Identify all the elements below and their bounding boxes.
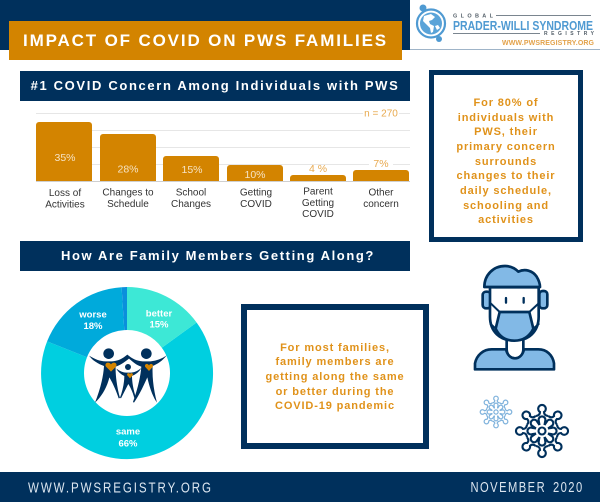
heading: #1 COVID concern: #1 COVID Concern Among Individuals with PWS — [31, 78, 399, 93]
label: better: 15% — [149, 320, 169, 330]
callout: most families: getting along the same — [266, 371, 404, 383]
label: better: better — [146, 308, 172, 320]
bar: Getting COVID 10%: Getting — [240, 188, 272, 198]
callout: 80% of individuals — [429, 70, 583, 242]
label: same: same — [116, 426, 140, 438]
callout: most families: For most families, — [280, 342, 390, 354]
icon: globe — [417, 4, 445, 42]
bar: Changes to Schedule 28%: Schedule — [107, 199, 149, 210]
icon: small light virus — [480, 396, 512, 428]
donut chart: family relations — [41, 287, 214, 460]
bar: Parent Getting COVID 4%: Getting — [302, 198, 334, 209]
bar: Loss of Activities 35%: Activities — [45, 200, 85, 210]
logo rule — [410, 49, 600, 50]
label: same: 66% — [118, 438, 138, 450]
segment: same 66% — [41, 322, 213, 459]
callout: 80% of individuals: daily schedule, — [460, 185, 552, 197]
heading: #1 COVID concern — [20, 71, 410, 101]
logo text — [453, 14, 595, 47]
bar: Getting COVID 10%: 10% — [244, 169, 266, 181]
bar: Parent Getting COVID 4%: COVID — [302, 209, 334, 220]
bar: Parent Getting COVID 4% — [290, 163, 346, 220]
top navy band — [0, 0, 410, 50]
bar: School Changes 15%: Changes — [171, 199, 211, 210]
callout: 80% of individuals: primary concern — [456, 141, 556, 153]
segment: worse 18% — [47, 287, 124, 357]
segment: better 15% — [127, 287, 197, 348]
bar chart: top concerns — [36, 108, 410, 220]
callout: 80% of individuals: PWS, their — [474, 126, 538, 138]
label: worse: 18% — [83, 321, 103, 332]
icon: family — [89, 348, 167, 403]
callout: 80% of individuals: changes to their — [457, 170, 555, 182]
bar: Loss of Activities 35% — [36, 122, 92, 210]
callout: 80% of individuals: For 80% of — [474, 97, 538, 109]
callout: most families: or better during the — [276, 386, 394, 398]
callout: 80% of individuals: surrounds — [475, 156, 537, 168]
callout: 80% of individuals: schooling and — [463, 200, 549, 212]
callout: most families — [241, 304, 429, 449]
bar: Changes to Schedule 28% — [100, 134, 156, 210]
bar: School Changes 15% — [163, 156, 219, 210]
callout: 80% of individuals: individuals with — [458, 112, 554, 124]
bar: Other concern 7%: Other — [368, 188, 394, 198]
callout: most families: family members are — [276, 356, 394, 368]
heading: family members — [20, 241, 410, 271]
icon: person wearing mask — [474, 264, 556, 371]
bar: Loss of Activities 35%: Loss of — [49, 188, 81, 199]
callout: most families: COVID-19 pandemic — [275, 400, 395, 412]
logo: Global Prader-Willi Syndrome Registry — [416, 4, 595, 47]
bar: Other concern 7%: concern — [363, 199, 399, 210]
logo text: GLOBAL — [453, 14, 494, 20]
bar: Parent Getting COVID 4%: Parent — [303, 186, 333, 198]
bar: Other concern 7%: 7% — [373, 158, 389, 170]
bar: School Changes 15%: 15% — [181, 164, 203, 176]
label: worse: worse — [78, 310, 107, 320]
bar: Parent Getting COVID 4%: 4 % — [309, 163, 327, 175]
bar: Other concern 7% — [353, 158, 409, 210]
title — [9, 21, 402, 60]
heading: family members: How Are Family Members Getting Along? — [61, 248, 375, 263]
footer: website: WWW.PWSREGISTRY.ORG — [28, 479, 213, 496]
bar: Getting COVID 10% — [227, 165, 283, 210]
bar: Loss of Activities 35%: 35% — [54, 152, 76, 164]
callout: 80% of individuals: activities — [478, 214, 534, 226]
bar: School Changes 15%: School — [176, 188, 206, 198]
sample size: n = 270 — [364, 108, 398, 120]
icon: large navy virus — [514, 404, 570, 458]
logo text: REGISTRY — [544, 31, 595, 37]
bar: Changes to Schedule 28%: 28% — [117, 164, 139, 176]
footer — [0, 472, 600, 502]
bar: Getting COVID 10%: COVID — [240, 199, 272, 210]
footer: date: NOVEMBER 2020 — [470, 479, 584, 495]
segment: sliver 1% — [122, 287, 127, 330]
logo text: WWW.PWSREGISTRY.ORG — [502, 40, 595, 47]
bar: Changes to Schedule 28%: Changes to — [102, 188, 154, 198]
title: IMPACT OF COVID ON PWS FAMILIES — [23, 31, 388, 50]
